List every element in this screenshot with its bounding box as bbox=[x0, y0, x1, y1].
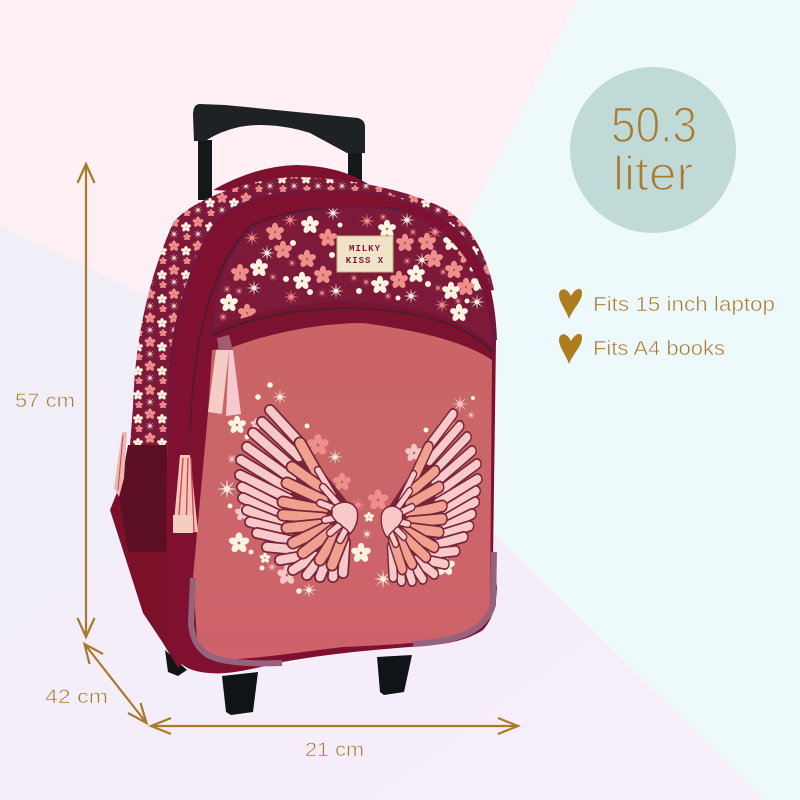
feature: books bbox=[559, 334, 725, 364]
lower side panel bbox=[110, 490, 185, 668]
back padding top bbox=[213, 165, 368, 195]
label patch: Milky Kiss X: MILKY bbox=[349, 244, 381, 254]
piping on front edge bbox=[168, 191, 496, 440]
icon: heart bbox=[559, 289, 582, 319]
main zipper line bbox=[190, 207, 400, 440]
trolley poles bbox=[198, 140, 362, 200]
background: lavender panel bbox=[0, 225, 765, 800]
label patch: Milky Kiss X: KISS X bbox=[346, 256, 384, 266]
front panel dark red bbox=[167, 191, 497, 673]
width label: 21 cm bbox=[305, 740, 364, 761]
side mesh pocket bbox=[118, 445, 168, 552]
volume badge: 50.3 bbox=[611, 97, 697, 153]
volume badge: liter bbox=[613, 148, 693, 201]
left wing bbox=[240, 410, 358, 577]
product photo: trolley backpack bbox=[110, 104, 497, 715]
side floral fabric bbox=[130, 177, 494, 445]
volume badge bbox=[570, 67, 736, 233]
floral top pocket bbox=[212, 207, 494, 350]
tassel: side pull bbox=[173, 428, 198, 533]
feature: laptop: Fits 15 inch laptop bbox=[593, 294, 775, 316]
depth label: 42 cm bbox=[45, 687, 108, 708]
bottom zipper trim bbox=[191, 552, 494, 663]
flowers around the wings bbox=[217, 382, 476, 598]
height arrow bbox=[78, 164, 94, 637]
width arrow bbox=[151, 718, 518, 734]
height label: 57 cm bbox=[15, 391, 75, 412]
zipper pull: front pocket ribbon bbox=[208, 335, 241, 416]
icon: heart bbox=[559, 334, 582, 364]
background: pale teal panel bbox=[440, 0, 800, 800]
right wing bbox=[381, 414, 478, 581]
zipper band bbox=[212, 302, 494, 362]
feature: books: Fits A4 books bbox=[593, 338, 725, 360]
salmon front pocket bbox=[193, 323, 492, 660]
label patch: Milky Kiss X bbox=[337, 236, 393, 272]
floral print bbox=[217, 205, 490, 323]
feature: laptop bbox=[559, 289, 775, 319]
wheels bbox=[165, 650, 412, 715]
tassel: small side pull bbox=[114, 432, 127, 497]
trolley handle bbox=[193, 104, 365, 153]
depth arrow bbox=[84, 644, 146, 723]
